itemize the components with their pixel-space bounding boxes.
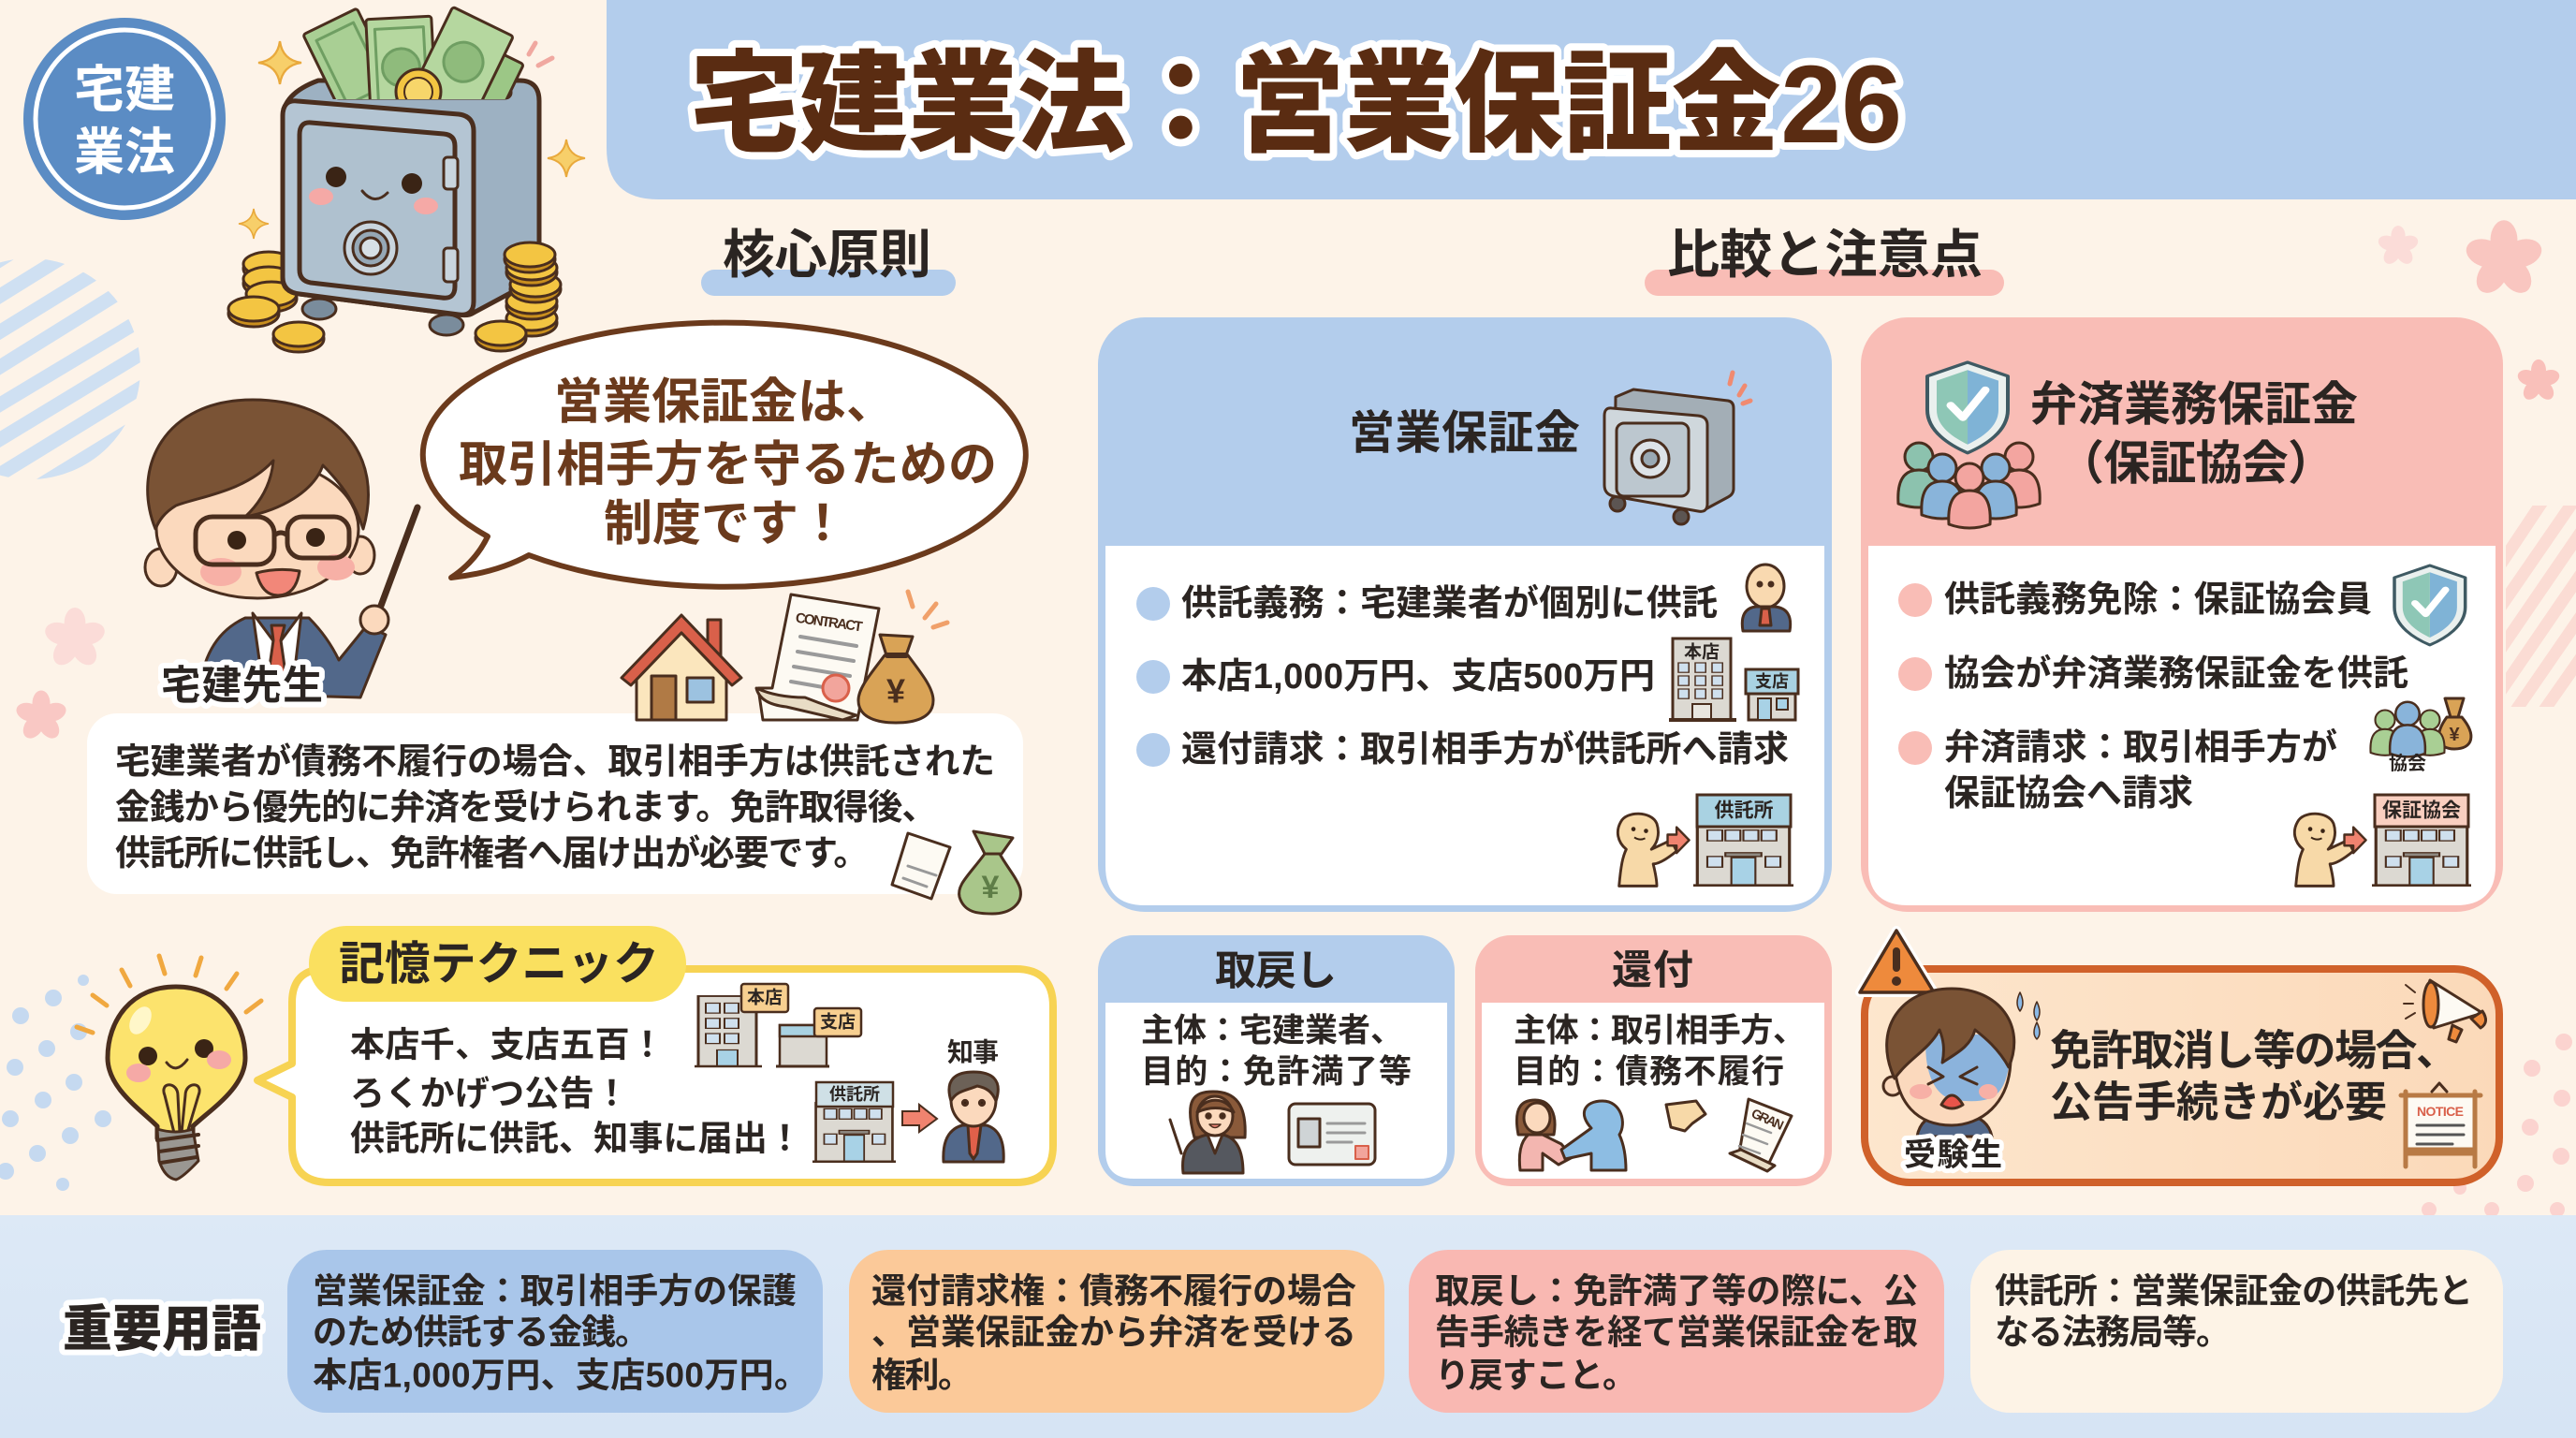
bullet list: 保証協会へ請求 xyxy=(1944,774,2193,814)
bullet list: 供託義務免除：保証協会員 xyxy=(1944,580,2372,620)
label pill xyxy=(309,926,686,1002)
icon: hand and document: GRAN xyxy=(1749,1106,1786,1133)
panel heading: （保証協会） xyxy=(2057,437,2334,490)
icon: head office xyxy=(695,984,788,1066)
icon: governor xyxy=(944,1072,1003,1162)
term card 2 xyxy=(849,1250,1384,1413)
principle text box: 金銭から優先的に弁済を受けられます。免許取得後、 xyxy=(115,787,937,827)
bullet list: 協会が弁済業務保証金を供託 xyxy=(1944,654,2408,694)
icon: deposit office xyxy=(812,1082,896,1162)
term card 2: 還付請求権：債務不履行の場合 xyxy=(871,1271,1356,1311)
bullet list: 還付請求：取引相手方が供託所へ請求 xyxy=(1181,730,1789,770)
callout: 公告手続き warning xyxy=(1860,931,2499,1182)
term card 4: 供託所：営業保証金の供託先と xyxy=(1995,1271,2473,1311)
decorative blue dots xyxy=(0,975,111,1191)
label: 受験生 xyxy=(1904,1137,2002,1173)
term card 1: 営業保証金：取引相手方の保護 xyxy=(313,1271,797,1311)
icon: notice board xyxy=(2401,1083,2481,1167)
icon: house xyxy=(622,615,741,720)
band: 重要用語 xyxy=(0,1215,2576,1438)
callout text: 免許取消し等の場合、 xyxy=(2050,1026,2458,1075)
icon: hand and document xyxy=(1666,1099,1792,1171)
term card 4: なる法務局等。 xyxy=(1995,1313,2231,1352)
icon: association and money bag: 協会 xyxy=(2389,753,2426,774)
bullet list: 供託義務：宅建業者が個別に供託 xyxy=(1181,584,1718,624)
badge: 宅建業法: 宅建 xyxy=(74,62,175,118)
principle text box xyxy=(87,713,1023,894)
icon: light bulb xyxy=(77,956,261,1180)
term card 3: り戻すこと。 xyxy=(1435,1356,1637,1395)
icon: deposit office xyxy=(1693,795,1793,886)
character: 受験生 xyxy=(1883,989,2040,1173)
speech bubble: 制度です！ xyxy=(604,497,847,551)
title: 宅建業法：営業保証金26 xyxy=(690,43,1902,167)
term card 3: 取戻し：免許満了等の際に、公 xyxy=(1435,1271,1918,1311)
panel: 還付 xyxy=(1475,935,1832,1186)
icon: deposit office: 供託所 xyxy=(1715,800,1773,822)
label pill: 記憶テクニック xyxy=(339,939,659,990)
label: 宅建先生 xyxy=(161,664,323,709)
icon: deposit office: 供託所 xyxy=(829,1085,880,1104)
principle text box: 供託所に供託し、免許権者へ届け出が必要です。 xyxy=(115,833,869,873)
speech bubble xyxy=(423,323,1026,587)
body text xyxy=(1141,1013,1412,1090)
icon: license card xyxy=(1289,1104,1375,1165)
term card 2: 権利。 xyxy=(871,1356,973,1395)
icon: group of people xyxy=(1898,443,2040,528)
decorative cherry blossoms xyxy=(14,220,2561,742)
bullet list xyxy=(1898,580,2408,814)
body text: 主体：取引相手方、 xyxy=(1514,1013,1806,1049)
panel heading xyxy=(2030,378,2358,490)
term card 1: 本店1,000万円、支店500万円。 xyxy=(313,1356,809,1395)
body text: 目的：免許満了等 xyxy=(1141,1054,1412,1090)
icon: small document and green money bag xyxy=(892,831,1020,914)
icon: sparkles xyxy=(239,41,585,239)
heading: 重要用語 xyxy=(63,1301,261,1357)
bullet list xyxy=(1136,584,1789,770)
title band xyxy=(607,0,2576,199)
mnemonic text: 本店千、支店五百！ xyxy=(350,1026,665,1064)
icon: association and money bag xyxy=(2370,698,2471,774)
speech bubble: 取引相手方を守るための xyxy=(459,438,997,492)
panel heading: 営業保証金 xyxy=(1349,408,1580,459)
icon: guarantee association building xyxy=(2372,795,2471,886)
term card 1 xyxy=(287,1250,823,1413)
icon: contract: CONTRACT xyxy=(795,610,863,635)
mnemonic text: 供託所に供託、知事に届出！ xyxy=(350,1120,802,1157)
bullet list: 弁済請求：取引相手方が xyxy=(1944,728,2337,768)
icon: megaphone xyxy=(2404,980,2486,1042)
icon: branch: 支店 xyxy=(820,1011,856,1032)
speech bubble: 営業保証金は、 xyxy=(554,375,895,430)
panel: 弁済業務保証金 xyxy=(1861,317,2503,912)
panel: 営業保証金 xyxy=(1098,317,1832,912)
bullet list: 本店1,000万円、支店500万円 xyxy=(1181,657,1655,697)
principle text box: 宅建業者が債務不履行の場合、取引相手方は供託された xyxy=(115,741,995,781)
icon: branch building: 支店 xyxy=(1755,672,1789,691)
icon: agent xyxy=(1742,565,1791,631)
term card 3 xyxy=(1409,1250,1944,1413)
panel heading: 弁済業務保証金 xyxy=(2030,378,2358,431)
badge: 宅建業法 xyxy=(23,18,226,220)
icon: handshake xyxy=(1516,1100,1626,1170)
label: 知事: 知事 xyxy=(947,1037,999,1067)
character: 宅建先生 xyxy=(145,400,417,709)
heading: 核心原則 xyxy=(701,225,956,296)
icon: branch building xyxy=(1746,669,1798,720)
icon: shield small xyxy=(2394,565,2466,645)
warning triangle xyxy=(1860,931,1934,992)
decorative pink dots xyxy=(2422,1034,2572,1217)
badge: 宅建業法: 業法 xyxy=(74,125,175,181)
arrow xyxy=(902,1105,937,1132)
icon: smiling safe with money and coins xyxy=(228,7,561,352)
body text: 目的：債務不履行 xyxy=(1514,1054,1784,1090)
mnemonic text xyxy=(350,1026,802,1157)
icon: association and money bag: ¥ xyxy=(2449,725,2460,745)
icon: head office: 本店 xyxy=(747,987,783,1007)
heading: 核心原則: 核心原則 xyxy=(723,225,931,285)
icon: contract xyxy=(756,594,879,720)
icon: small document and green money bag: ¥ xyxy=(982,870,1000,905)
icon: safe xyxy=(1604,373,1750,524)
term card 3: 告手続きを経て営業保証金を取 xyxy=(1435,1313,1918,1352)
mnemonic text: ろくかげつ公告！ xyxy=(350,1075,629,1112)
term card 1: のため供託する金銭。 xyxy=(313,1313,650,1352)
icon: head office building: 本店 xyxy=(1684,642,1720,663)
term card 4 xyxy=(1970,1250,2503,1413)
icon: guarantee association building: 保証協会 xyxy=(2382,800,2461,822)
icon: person with arrow xyxy=(2294,814,2366,886)
heading: 比較と注意点: 比較と注意点 xyxy=(1667,225,1983,285)
icon: branch xyxy=(776,1008,861,1066)
term card 2: 、営業保証金から弁済を受ける xyxy=(871,1313,1356,1352)
panel: 取戻し xyxy=(1098,935,1455,1186)
icon: woman teacher xyxy=(1170,1092,1245,1173)
body text: 主体：宅建業者、 xyxy=(1141,1013,1403,1049)
icon: yen money bag: ¥ xyxy=(886,672,905,710)
icon: shield xyxy=(1927,362,2008,453)
icon: head office building xyxy=(1669,638,1736,720)
icon: person with arrow xyxy=(1617,814,1690,886)
panel: 記憶テクニック xyxy=(257,926,1053,1182)
icon: notice board: NOTICE xyxy=(2417,1104,2464,1119)
callout text: 公告手続きが必要 xyxy=(2050,1078,2387,1125)
decorative striped circle xyxy=(0,259,140,479)
icon: yen money bag xyxy=(858,592,947,723)
heading: 還付 xyxy=(1612,948,1693,993)
decorative pink stripes xyxy=(2506,506,2576,707)
body text xyxy=(1514,1013,1806,1090)
heading: 取戻し xyxy=(1215,947,1337,994)
callout text xyxy=(2050,1026,2458,1125)
